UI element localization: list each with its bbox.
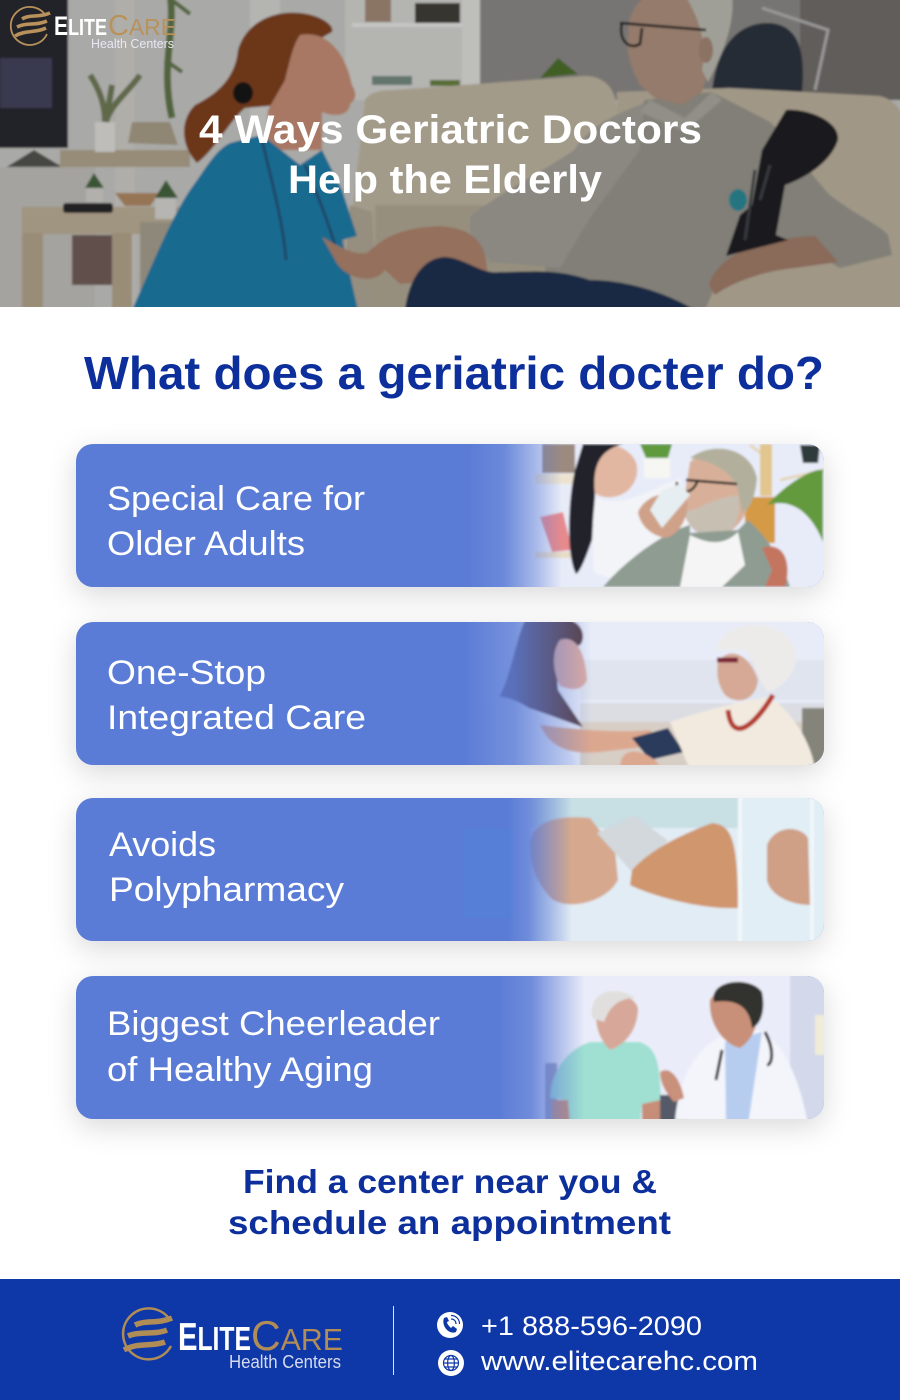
nurse hair (184, 13, 332, 163)
vase and dried plant (95, 122, 115, 152)
logo mark: top swoosh (11, 7, 50, 45)
title (199, 108, 702, 202)
side table (22, 207, 192, 234)
divider (393, 1306, 394, 1375)
card text (107, 654, 366, 737)
phone number: +1 888-596-2090 (481, 1311, 702, 1341)
call to action text: Find a center near you & (243, 1163, 657, 1200)
card text: One-Stop (107, 654, 266, 692)
nurse body (132, 135, 358, 310)
fade overlay (468, 444, 558, 587)
fade overlay (508, 798, 569, 941)
logo: footer Elite Care: ELITE (178, 1316, 251, 1359)
panel: hero photo banner (0, 0, 900, 320)
nurse face (265, 34, 355, 150)
icon: phone (437, 1312, 463, 1338)
website: www.elitecarehc.com (480, 1346, 758, 1376)
panel: card 3 avoids polypharmacy (76, 788, 840, 953)
shelves (346, 0, 462, 99)
jeans (405, 257, 695, 310)
card text: Avoids (109, 826, 216, 864)
panel: card 2 one-stop care (76, 612, 840, 777)
logo: top Elite Care: CARE (108, 10, 176, 42)
nurse arm and hands (322, 226, 487, 284)
hat on shelf (128, 122, 178, 145)
crutch (726, 110, 838, 256)
heading: what does a geriatric doctor do: What does a geriatric docter do? (84, 347, 824, 399)
man sweater (545, 92, 892, 310)
card text: Special Care for (107, 480, 365, 518)
card text: of Healthy Aging (107, 1051, 373, 1089)
plant behind sofa (540, 58, 578, 78)
logo: footer Elite Care (123, 1308, 343, 1372)
logo: footer Elite Care: CARE (251, 1312, 343, 1359)
panel: card 4 cheerleader (76, 966, 840, 1131)
icon: globe (438, 1350, 464, 1376)
fade overlay (466, 622, 586, 765)
logo: footer Elite Care: Health Centers (229, 1352, 341, 1372)
panel: card 1 special care (76, 434, 840, 599)
logo: top Elite Care (11, 7, 176, 51)
tv (0, 0, 68, 148)
card text: Polypharmacy (109, 871, 344, 909)
fade overlay (498, 976, 582, 1119)
photo: hands holding pill blister (514, 798, 824, 941)
chair (712, 23, 803, 92)
man hand (709, 236, 838, 295)
card text: Older Adults (107, 525, 305, 563)
title: 4 Ways Geriatric Doctors (199, 108, 702, 152)
logo: top Elite Care: Health Centers (91, 36, 174, 51)
card text (107, 480, 365, 563)
card text (107, 1005, 440, 1089)
card text: Integrated Care (107, 699, 366, 737)
hero darkening overlay (0, 0, 900, 307)
card text (109, 826, 344, 909)
photo: doctor talks with older patient (508, 976, 824, 1119)
title: Help the Elderly (288, 158, 603, 202)
call to action text: schedule an appointment (228, 1204, 671, 1241)
man head (626, 0, 706, 105)
brick wall (479, 0, 802, 100)
card text: Biggest Cheerleader (107, 1005, 440, 1043)
pill bottle (463, 828, 513, 918)
call to action text (228, 1163, 671, 1241)
logo mark: footer swoosh (123, 1308, 172, 1359)
photo: nurse measuring blood pressure (476, 622, 824, 765)
logo: top Elite Care: ELITE (54, 11, 107, 41)
shelf behind table (60, 150, 190, 167)
sofa (352, 75, 618, 246)
panel: footer (0, 1279, 900, 1400)
photo: caregiver helps older man drink (484, 444, 824, 587)
